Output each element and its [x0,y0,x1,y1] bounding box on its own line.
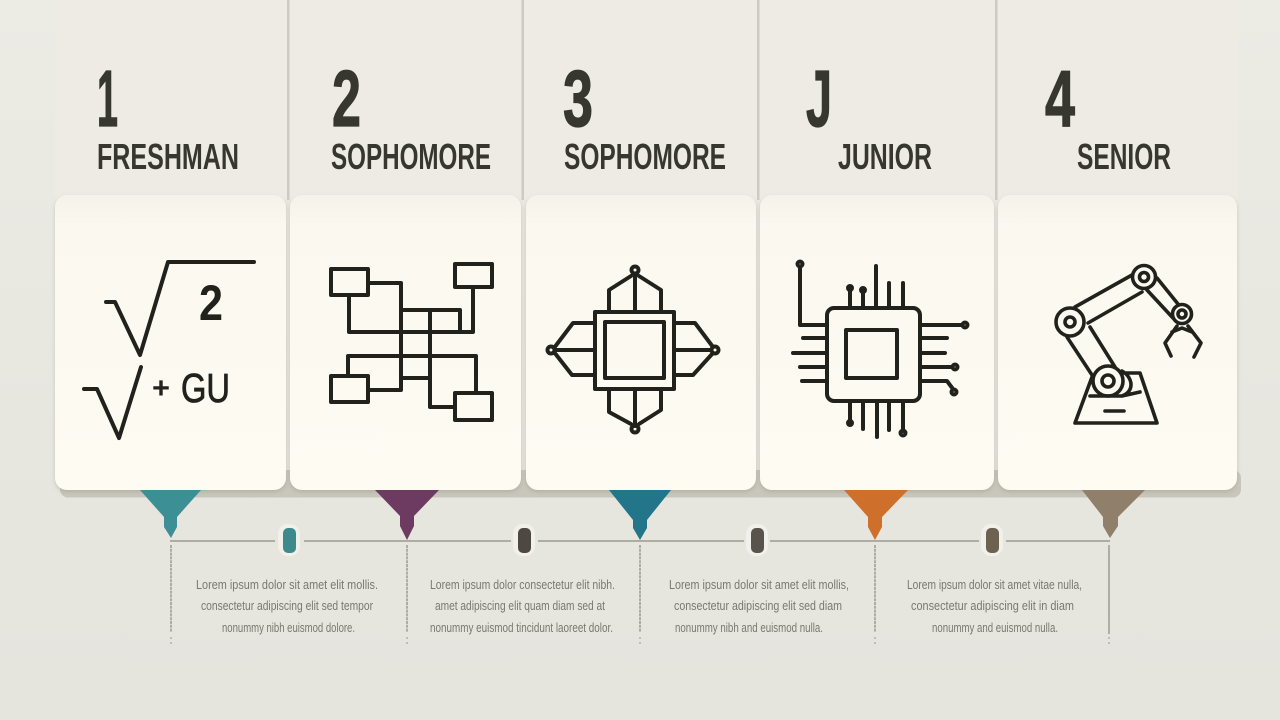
panel: year 3 sophomore [526,54,756,490]
panel: year 1 freshman [55,54,286,490]
text block: year 1: Lorem ipsum dolor sit amet elit mollis. [196,578,378,592]
heading: year 4 [1045,54,1171,177]
heading: year J: JUNIOR [838,136,932,177]
heading: year 2: 2 [332,54,361,143]
marker: blue pointer [609,490,671,540]
heading: year J [806,54,932,177]
node: grey pill [746,524,768,556]
node: dark pill [513,524,535,556]
marker: teal pointer [140,490,201,538]
icon: square root formula [84,262,254,438]
text block: year 3 [669,578,849,635]
marker: purple pointer [375,490,439,540]
heading: year 3: 3 [563,54,593,143]
node: brown pill [981,524,1003,556]
text block: year 2: nonummy euismod tincidunt laoreet dolor. [430,621,613,635]
heading: year 1: FRESHMAN [97,136,239,177]
node: teal pill [278,524,300,556]
heading: year 2 [331,54,491,177]
icon: circuit node chip [548,266,718,432]
heading: year 2: SOPHOMORE [331,136,491,177]
text block: year 3: Lorem ipsum dolor sit amet elit mollis, [669,578,849,592]
icon: square root formula: 2 [199,275,223,331]
icon: square root formula: + [152,372,170,405]
marker: brown pointer [1082,490,1145,538]
panel: year J junior [760,54,994,490]
icon: microchip [793,262,968,437]
heading: year J: J [806,54,832,143]
heading: year 1: 1 [97,54,118,143]
heading: year 1 [97,54,239,177]
icon: flow diagram [331,264,492,420]
text block: year 2 [430,578,615,635]
panel: year 4 senior [998,54,1237,490]
heading: year 3 [563,54,726,177]
text block: year 4: nonummy and euismod nulla. [932,621,1058,635]
text block: year 4: consectetur adipiscing elit in diam [911,599,1074,613]
text block: year 4 [907,578,1082,635]
text block: year 1 [196,578,378,635]
icon: square root formula: GU [181,365,230,411]
heading: year 3: SOPHOMORE [564,136,726,177]
heading: year 4: SENIOR [1077,136,1171,177]
text block: year 2: amet adipiscing elit quam diam sed at [435,599,605,613]
text block: year 4: Lorem ipsum dolor sit amet vitae nulla, [907,578,1082,592]
panel: year 2 sophomore [290,54,521,490]
timeline connector [170,541,1110,645]
icon: robot arm [1056,266,1201,423]
text block: year 3: consectetur adipiscing elit sed diam [674,599,842,613]
heading: year 4: 4 [1045,54,1075,143]
text block: year 3: nonummy nibh and euismod nulla. [675,621,823,635]
marker: orange pointer [844,490,908,540]
text block: year 1: consectetur adipiscing elit sed tempor [201,599,373,613]
text block: year 2: Lorem ipsum dolor consectetur elit nibh. [430,578,615,592]
text block: year 1: nonummy nibh euismod dolore. [222,621,355,635]
